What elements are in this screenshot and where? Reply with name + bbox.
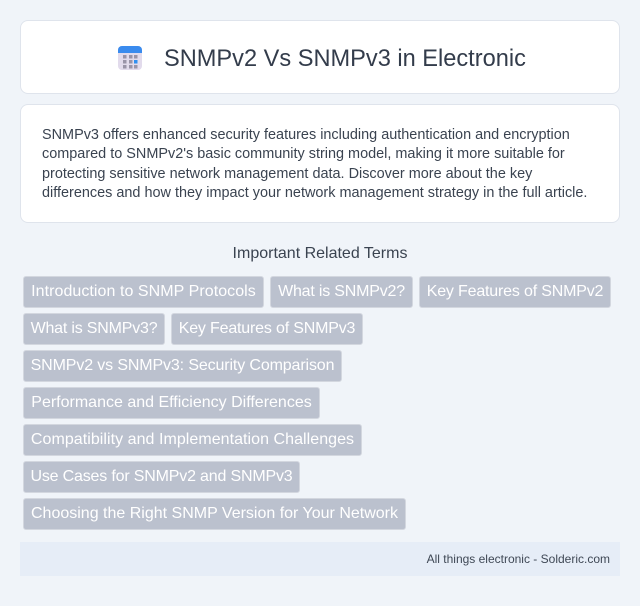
tag <box>419 276 611 308</box>
tag: Introduction to SNMP Protocols <box>31 283 256 300</box>
tag: What is SNMPv3? <box>31 320 157 337</box>
tag: Performance and Efficiency Differences <box>31 394 312 411</box>
tag: Use Cases for SNMPv2 and SNMPv3 <box>30 468 293 485</box>
title: SNMPv2 Vs SNMPv3 in Electronic <box>164 46 526 72</box>
tag <box>23 424 362 456</box>
tag <box>23 387 320 419</box>
tag <box>23 461 300 493</box>
tag <box>23 276 264 308</box>
summary text: compared to SNMPv2's basic community string model, making it more suitable for <box>42 146 565 162</box>
tag: Key Features of SNMPv2 <box>427 283 603 300</box>
tag <box>171 313 363 345</box>
icon: calendar grid <box>118 46 142 70</box>
tag <box>270 276 413 308</box>
tag: What is SNMPv2? <box>278 283 405 300</box>
tag <box>23 350 342 382</box>
section heading: Important Related Terms <box>233 245 407 262</box>
tag <box>23 313 165 345</box>
tag: Choosing the Right SNMP Version for Your Network <box>31 505 398 522</box>
footer credit: All things electronic - Solderic.com <box>427 552 610 566</box>
header panel <box>20 20 620 94</box>
summary text <box>42 126 587 201</box>
summary panel <box>20 104 620 223</box>
tag <box>23 498 406 530</box>
summary text: SNMPv3 offers enhanced security features including authentication and encryption <box>42 126 570 142</box>
summary text: protecting sensitive network management data. Discover more about the key <box>42 166 532 182</box>
tag: SNMPv2 vs SNMPv3: Security Comparison <box>31 357 334 374</box>
tag: Key Features of SNMPv3 <box>179 320 355 337</box>
footer bar <box>20 542 620 576</box>
summary text: differences and how they impact your network management strategy in the full article. <box>42 185 587 201</box>
tag: Compatibility and Implementation Challenges <box>31 431 354 448</box>
